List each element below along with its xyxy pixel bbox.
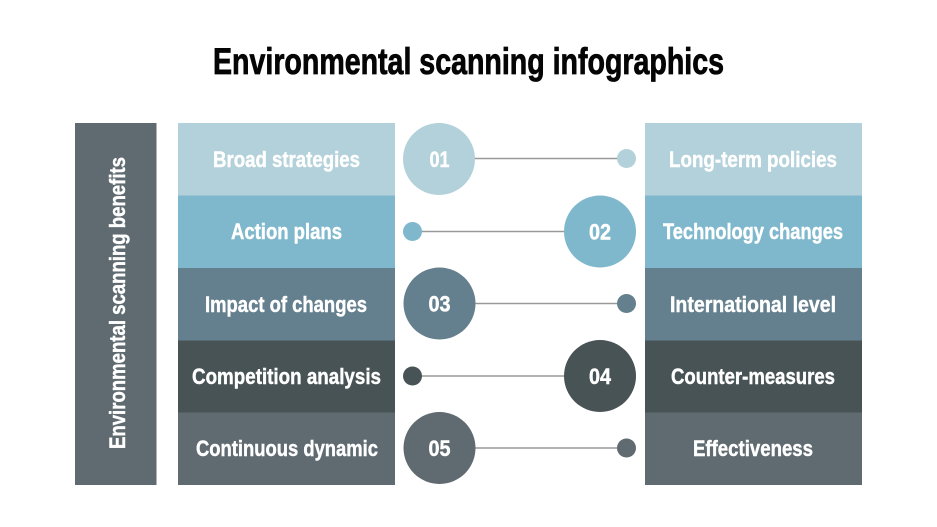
number circle 04: 04 [589, 364, 611, 389]
right label: Counter-measures: Counter-measures [671, 364, 835, 389]
panel: side heading [75, 123, 156, 485]
right label: Technology changes: Technology changes [663, 219, 843, 244]
panel: row 05 [178, 412, 862, 485]
connector 01 [470, 149, 636, 168]
left label: Action plans: Action plans [231, 219, 342, 244]
left label: Continuous dynamic [178, 412, 395, 485]
right label: International level: International level [670, 292, 836, 317]
left label: Broad strategies: Broad strategies [213, 147, 360, 172]
panel: row 01 [178, 123, 862, 196]
right label: Effectiveness: Effectiveness [693, 436, 813, 461]
right label: Effectiveness [645, 412, 862, 485]
right label: Long-term policies [645, 123, 862, 196]
number circle 01: 01 [430, 147, 450, 172]
number circle 02: 02 [589, 220, 611, 244]
panel: side heading: Environmental scanning benefits [105, 157, 130, 449]
left label: Impact of changes [178, 268, 395, 340]
left label: Broad strategies [178, 123, 395, 196]
right label: International level [645, 268, 862, 340]
number circle 03 [404, 268, 476, 340]
number circle 01 [403, 123, 475, 195]
number circle 04 [564, 340, 636, 412]
number circle 05 [404, 412, 476, 484]
left label: Competition analysis [178, 340, 395, 412]
connector 03 [470, 294, 636, 313]
connector 05 [470, 438, 636, 458]
right label: Technology changes [645, 196, 862, 268]
number circle 05: 05 [428, 436, 450, 461]
right label: Counter-measures [645, 340, 862, 412]
connector 04 [403, 366, 570, 386]
left label: Competition analysis: Competition analysis [192, 364, 381, 389]
left label: Action plans [178, 196, 395, 268]
left label: Impact of changes: Impact of changes [205, 292, 367, 317]
right label: Long-term policies: Long-term policies [669, 147, 837, 172]
number circle 03: 03 [428, 292, 450, 316]
panel: row 02 [178, 196, 862, 268]
panel: row 04 [178, 340, 862, 412]
connector 02 [403, 222, 570, 241]
title: Environmental scanning infographics [213, 41, 724, 82]
left label: Continuous dynamic: Continuous dynamic [196, 436, 378, 461]
panel: row 03 [178, 268, 862, 340]
number circle 02 [564, 196, 636, 268]
